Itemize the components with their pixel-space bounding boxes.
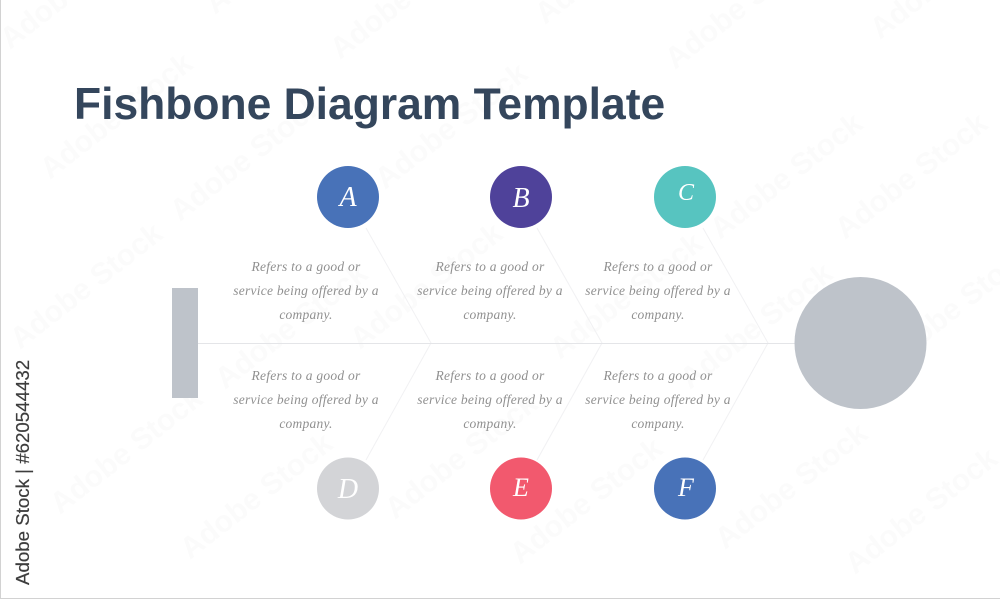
text block: bottom right: service being offered by a bbox=[585, 392, 731, 407]
node C: C bbox=[678, 180, 695, 206]
fish tail bbox=[172, 288, 198, 398]
text block: top middle: company. bbox=[463, 307, 517, 322]
text block: bottom left: company. bbox=[279, 416, 333, 431]
text block: bottom left: Refers to a good or bbox=[250, 368, 361, 383]
text block: top left: service being offered by a bbox=[233, 283, 379, 298]
fishbone spine bbox=[198, 342, 795, 344]
node E bbox=[490, 458, 552, 520]
watermark pattern: Adobe Stock bbox=[209, 256, 374, 396]
watermark pattern: Adobe Stock bbox=[379, 386, 544, 526]
node F: F bbox=[677, 473, 695, 502]
watermark pattern: Adobe Stock bbox=[544, 226, 709, 366]
node F bbox=[654, 458, 716, 520]
text block: top left: Refers to a good or bbox=[250, 259, 361, 274]
watermark pattern: Adobe Stock bbox=[4, 216, 169, 356]
text block: top right: Refers to a good or bbox=[602, 259, 713, 274]
stock id side label: Adobe Stock | #620544432 bbox=[12, 360, 33, 585]
watermark pattern: Adobe Stock bbox=[674, 256, 839, 396]
watermark pattern: Adobe Stock bbox=[504, 431, 669, 571]
fishbone ribs bbox=[366, 228, 768, 460]
node D bbox=[317, 458, 379, 520]
watermark pattern: Adobe Stock bbox=[34, 46, 199, 186]
text block: bottom middle: service being offered by a bbox=[417, 392, 563, 407]
watermark pattern: Adobe Stock bbox=[369, 56, 534, 196]
text block: top right: company. bbox=[631, 307, 685, 322]
watermark pattern: Adobe Stock bbox=[709, 416, 874, 556]
text block: bottom middle: company. bbox=[463, 416, 517, 431]
text block: bottom left: service being offered by a bbox=[233, 392, 379, 407]
watermark pattern: Adobe Stock bbox=[829, 106, 994, 246]
text block: top right: service being offered by a bbox=[585, 283, 731, 298]
text block: top middle: Refers to a good or bbox=[434, 259, 545, 274]
text block: top left: company. bbox=[279, 307, 333, 322]
watermark pattern: Adobe Stock bbox=[44, 381, 209, 521]
watermark pattern: Adobe Stock bbox=[164, 88, 329, 228]
watermark pattern: Adobe Stock bbox=[344, 216, 509, 356]
node B bbox=[490, 166, 552, 228]
text block: bottom right: company. bbox=[631, 416, 685, 431]
title: Fishbone Diagram Template bbox=[74, 80, 665, 129]
text block: bottom right: Refers to a good or bbox=[602, 368, 713, 383]
node C bbox=[654, 166, 716, 228]
fish head bbox=[794, 277, 926, 409]
node B: B bbox=[512, 183, 530, 214]
watermark pattern: Adobe Stock bbox=[704, 106, 869, 246]
text block: top middle: service being offered by a bbox=[417, 283, 563, 298]
node D: D bbox=[337, 474, 358, 505]
text block: bottom middle: Refers to a good or bbox=[434, 368, 545, 383]
node E: E bbox=[512, 473, 529, 502]
watermark pattern: Adobe Stock bbox=[174, 426, 339, 566]
node A: A bbox=[337, 182, 357, 213]
watermark pattern: Adobe Stock bbox=[839, 441, 1000, 581]
node A bbox=[317, 166, 379, 228]
